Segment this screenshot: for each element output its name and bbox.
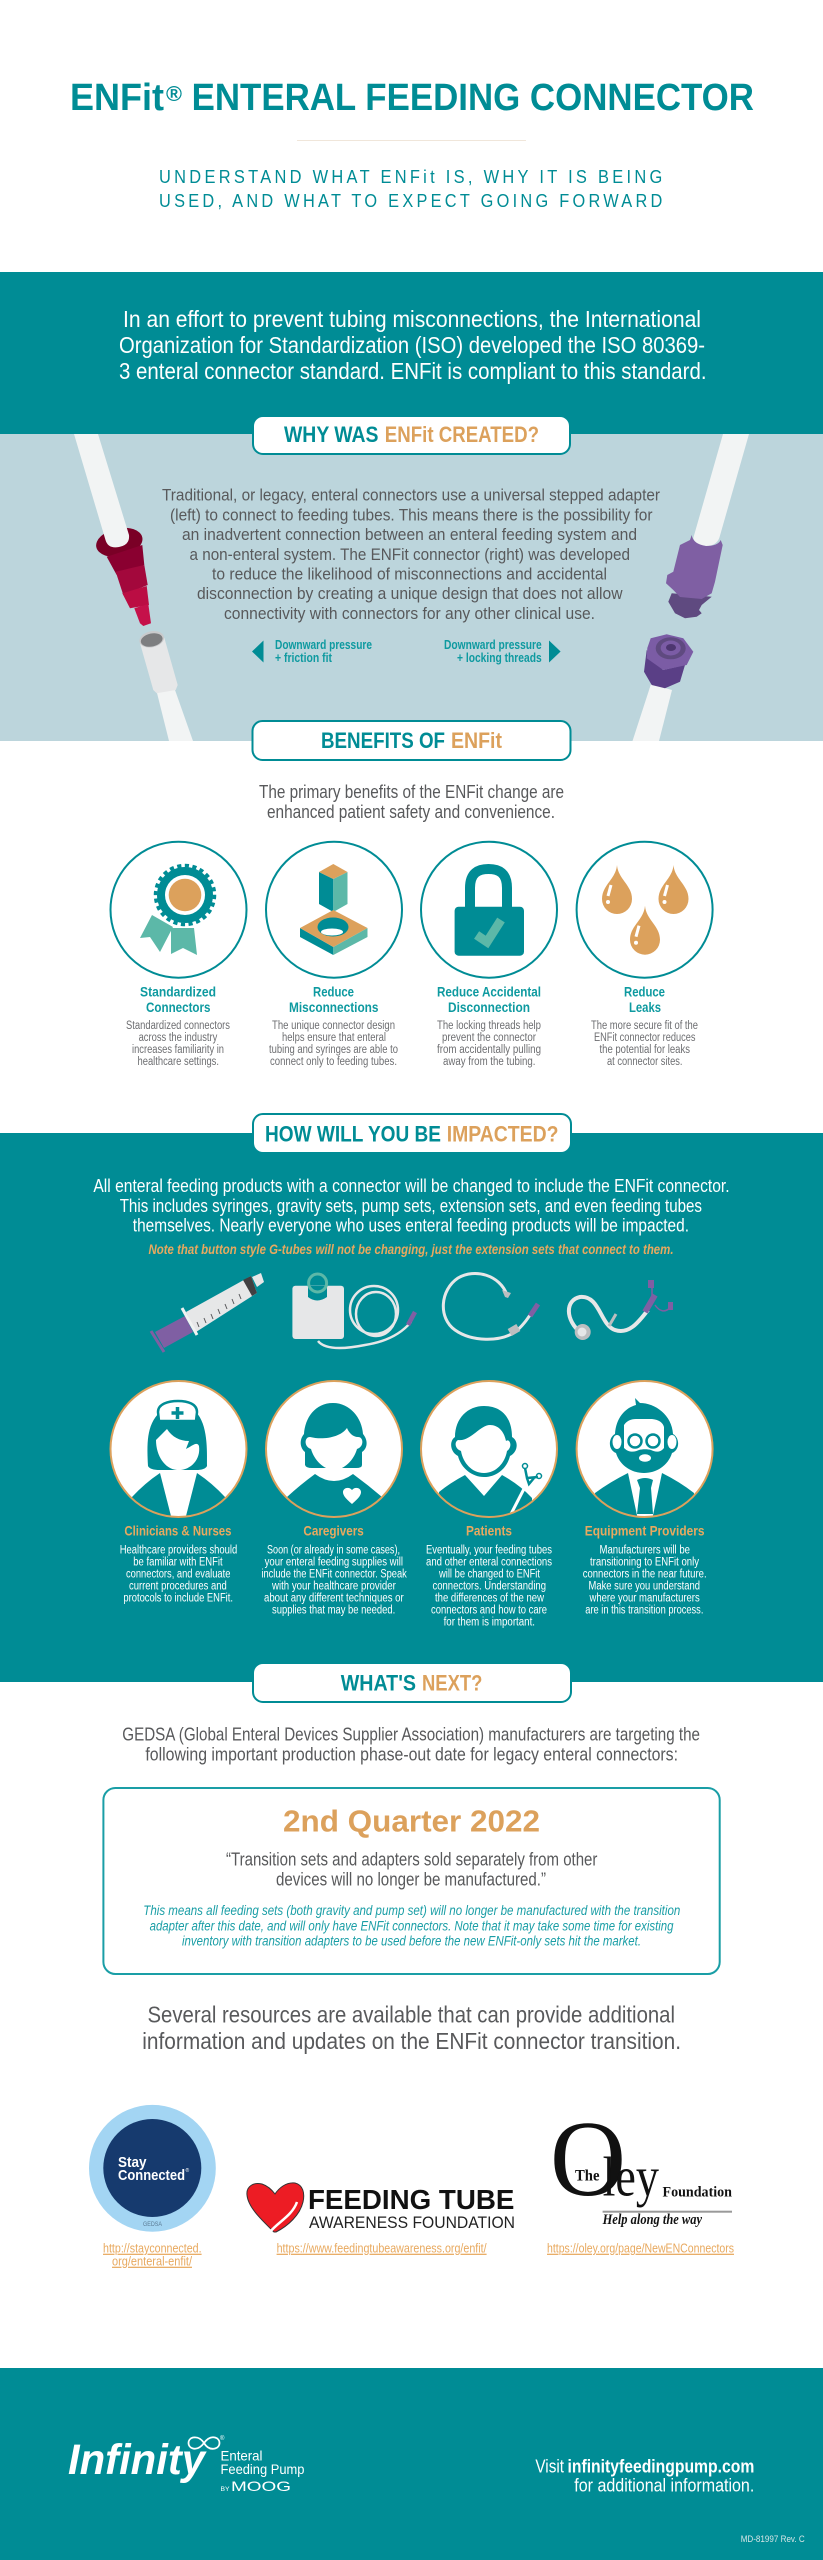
group: equipment providers: Make sure you understand: [588, 1580, 700, 1592]
title: ENTERAL FEEDING CONNECTOR: [192, 77, 754, 119]
logo: Infinity: Feeding Pump: [220, 2461, 305, 2477]
group: patients: for them is important.: [444, 1616, 535, 1628]
group: clinicians and nurses: protocols to include ENFit.: [123, 1592, 233, 1604]
logo: Oley foundation: O: [550, 2100, 626, 2219]
benefit: reduce leaks: [591, 984, 698, 1068]
explanation text: a non-enteral system. The ENFit connector (right) was developed: [190, 545, 630, 564]
heading pill: WHY WAS: [284, 422, 378, 447]
icon: caregiver: [266, 1381, 402, 1520]
link: feeding tube awareness: https://www.feedingtubeawareness.org/enfit/: [277, 2242, 487, 2256]
logo: feeding tube awareness foundation: [247, 2183, 515, 2232]
benefits intro: enhanced patient safety and convenience.: [267, 802, 555, 822]
benefit: reduce accidental disconnection: from accidentally pulling: [437, 1044, 541, 1056]
ENFit connector illustration: [632, 434, 749, 741]
callout: key date: inventory with transition adapters to be used before the new ENFit-only sets hit the market.: [182, 1934, 641, 1949]
group: clinicians and nurses: connectors, and evaluate: [126, 1568, 230, 1580]
heading pill: [253, 1663, 571, 1702]
logo: Infinity: MOOG: [231, 2478, 291, 2494]
logo: Oley foundation: Help along the way: [602, 2212, 702, 2228]
link: Oley: https://oley.org/page/NewENConnectors: [547, 2242, 734, 2256]
panel: why was ENFit created: [0, 416, 823, 741]
group: equipment providers: transitioning to ENFit only: [590, 1556, 699, 1568]
benefit: reduce misconnections: connect only to feeding tubes.: [270, 1056, 397, 1068]
group: equipment providers: where your manufacturers: [589, 1592, 700, 1604]
logo: Infinity: ®: [220, 2435, 225, 2442]
explanation text: Traditional, or legacy, enteral connectors use a universal stepped adapter: [162, 486, 660, 505]
logo: Oley foundation: Foundation: [662, 2185, 733, 2201]
explanation text: [162, 486, 660, 623]
icon: padlock: [421, 842, 557, 978]
benefit: reduce misconnections: [269, 984, 398, 1068]
group: patients: Patients: [466, 1523, 512, 1539]
caption: legacy: + friction fit: [275, 651, 333, 665]
group: equipment providers: Equipment Providers: [585, 1523, 705, 1539]
icon: gravity bag: [292, 1274, 415, 1348]
group: patients: and other enteral connections: [426, 1556, 552, 1568]
benefit: reduce leaks: the potential for leaks: [600, 1044, 690, 1056]
group: caregivers: include the ENFit connector. Speak: [261, 1568, 407, 1580]
group: caregivers: Caregivers: [303, 1523, 364, 1539]
callout: key date: devices will no longer be manufactured.”: [276, 1869, 546, 1889]
intro text: 3 enteral connector standard. ENFit is compliant to this standard.: [119, 358, 706, 384]
heading pill: [252, 721, 570, 760]
arrow: right: [549, 640, 561, 662]
document code: MD-81997 Rev. C: [741, 2534, 805, 2545]
benefit: reduce leaks: Leaks: [629, 999, 661, 1015]
benefit: reduce leaks: The more secure fit of the: [591, 1020, 698, 1032]
explanation text: disconnection by creating a unique design that does not allow: [197, 584, 623, 603]
benefit: reduce misconnections: The unique connector design: [272, 1020, 395, 1032]
benefit: standardized connectors: healthcare settings.: [138, 1056, 219, 1068]
logo: feeding tube awareness foundation: AWARENESS FOUNDATION: [309, 2213, 515, 2232]
GEDSA text: GEDSA (Global Enteral Devices Supplier Association) manufacturers are targeting the: [122, 1725, 700, 1745]
group: patients: connectors. Understanding: [432, 1580, 546, 1592]
group: clinicians and nurses: be familiar with ENFit: [133, 1556, 223, 1568]
footer call to action: infinityfeedingpump.com: [568, 2456, 754, 2476]
heading pill: IMPACTED?: [447, 1122, 558, 1146]
logo: Infinity: [68, 2435, 305, 2494]
impact text: themselves. Nearly everyone who uses enteral feeding products will be impacted.: [133, 1216, 689, 1236]
benefit: reduce misconnections: Reduce: [313, 984, 354, 1000]
panel: how will you be impacted: [0, 1114, 823, 1682]
link: stay connected: org/enteral-enfit/: [112, 2255, 192, 2269]
footer call to action: Visit: [535, 2456, 564, 2476]
title: ®: [166, 83, 183, 106]
logo: Infinity: Enteral: [220, 2448, 262, 2464]
icon: patient: [421, 1381, 557, 1520]
benefit: reduce misconnections: helps ensure that enteral: [282, 1032, 386, 1044]
logo: stay connected: ®: [186, 2167, 190, 2174]
benefit: standardized connectors: increases familiarity in: [132, 1044, 224, 1056]
caption: ENFit: Downward pressure: [444, 638, 542, 652]
intro text: Organization for Standardization (ISO) developed the ISO 80369-: [119, 332, 705, 358]
link: stay connected: http://stayconnected.: [103, 2242, 202, 2256]
GEDSA text: [122, 1725, 700, 1764]
group: patients: Eventually, your feeding tubes: [426, 1544, 552, 1556]
group: equipment providers: are in this transition process.: [585, 1604, 703, 1616]
group: patients: connectors and how to care: [431, 1604, 547, 1616]
logo: Infinity: BY: [220, 2487, 230, 2493]
benefit: reduce misconnections: Misconnections: [289, 999, 379, 1015]
heading pill: ENFit: [451, 728, 503, 753]
benefits intro: [259, 782, 564, 822]
panel: benefits: [110, 721, 713, 1068]
benefit: reduce accidental disconnection: The locking threads help: [437, 1020, 541, 1032]
subtitle: USED, AND WHAT TO EXPECT GOING FORWARD: [159, 191, 666, 211]
icon: rosette: [110, 842, 246, 978]
intro text: In an effort to prevent tubing misconnections, the International: [123, 306, 701, 332]
logo: stay connected: Connected: [118, 2167, 185, 2184]
logo: feeding tube awareness foundation: FEEDING TUBE: [308, 2184, 514, 2215]
footer call to action: [535, 2456, 754, 2496]
group: patients: the differences of the new: [435, 1592, 545, 1604]
group: caregivers: your enteral feeding supplies will: [265, 1556, 403, 1568]
callout: key date: 2nd Quarter 2022: [283, 1804, 540, 1839]
group: caregivers: about any different techniques or: [264, 1592, 404, 1604]
group: clinicians and nurses: Clinicians & Nurses: [124, 1523, 232, 1539]
heading pill: NEXT?: [422, 1671, 482, 1696]
icon: equipment provider: [577, 1381, 713, 1520]
benefit: standardized connectors: [126, 984, 230, 1068]
header: [70, 77, 754, 211]
resources text: [142, 2002, 681, 2054]
footer call to action: for additional information.: [574, 2476, 754, 2496]
callout: key date: This means all feeding sets (both gravity and pump set) will no longer be manufactured with the transition: [143, 1903, 680, 1918]
note: Note that button style G-tubes will not be changing, just the extension sets that connect to them.: [148, 1242, 674, 1257]
explanation text: connectivity with connectors for any other clinical use.: [224, 604, 595, 623]
group: caregivers: [261, 1523, 407, 1616]
logo: stay connected: Stay: [118, 2154, 147, 2171]
heading pill: HOW WILL YOU BE: [265, 1122, 441, 1146]
benefit: standardized connectors: Standardized: [140, 984, 216, 1000]
benefit: standardized connectors: Connectors: [146, 999, 211, 1015]
panel: footer: [0, 2368, 823, 2560]
group: clinicians and nurses: Healthcare providers should: [120, 1544, 237, 1556]
heading pill: WHAT'S: [341, 1671, 416, 1696]
benefit: standardized connectors: Standardized connectors: [126, 1020, 230, 1032]
heading pill: [253, 416, 570, 454]
group: patients: will be changed to ENFit: [438, 1568, 541, 1580]
subtitle: [159, 167, 666, 211]
icon: nurse: [110, 1381, 246, 1520]
icon: low profile tube: [569, 1280, 673, 1340]
group: equipment providers: connectors in the near future.: [583, 1568, 707, 1580]
group: caregivers: with your healthcare provider: [271, 1580, 396, 1592]
benefit: reduce leaks: at connector sites.: [607, 1056, 682, 1068]
caption: legacy: Downward pressure: [275, 638, 372, 652]
logo: Oley foundation: The: [575, 2168, 600, 2185]
benefit: reduce accidental disconnection: away from the tubing.: [443, 1056, 536, 1068]
resources text: Several resources are available that can provide additional: [148, 2002, 675, 2028]
explanation text: to reduce the likelihood of misconnections and accidental: [212, 564, 607, 584]
caption: ENFit: + locking threads: [457, 651, 542, 665]
benefit: reduce misconnections: tubing and syringes are able to: [269, 1044, 398, 1056]
impact text: This includes syringes, gravity sets, pump sets, extension sets, and even feeding tubes: [120, 1196, 702, 1216]
link: stay connected: [103, 2242, 202, 2269]
benefit: standardized connectors: across the industry: [139, 1032, 218, 1044]
caption: ENFit: [444, 638, 542, 665]
icon: three drops: [577, 842, 713, 978]
benefit: reduce leaks: ENFit connector reduces: [594, 1032, 696, 1044]
heading pill: BENEFITS OF: [321, 728, 445, 753]
icon: peg and hole: [266, 842, 402, 978]
impact text: All enteral feeding products with a connector will be changed to include the ENFit connector.: [93, 1176, 730, 1196]
GEDSA text: following important production phase-out date for legacy enteral connectors:: [145, 1744, 678, 1764]
benefit: reduce accidental disconnection: Disconnection: [448, 999, 530, 1015]
logo: stay connected: GEDSA: [143, 2222, 162, 2228]
explanation text: (left) to connect to feeding tubes. This means there is the possibility for: [170, 506, 653, 524]
benefit: reduce accidental disconnection: prevent the connector: [442, 1032, 536, 1044]
logo: Oley foundation: ley: [603, 2147, 659, 2209]
group: caregivers: Soon (or already in some cases),: [267, 1544, 400, 1556]
logo: stay connected: [89, 2105, 216, 2232]
impact text: [93, 1176, 730, 1236]
resources text: information and updates on the ENFit connector transition.: [142, 2028, 681, 2054]
callout: key date: “Transition sets and adapters sold separately from other: [226, 1850, 597, 1870]
benefit: reduce accidental disconnection: [437, 984, 541, 1068]
benefit: reduce leaks: Reduce: [624, 984, 665, 1000]
group: equipment providers: [583, 1523, 707, 1616]
group: equipment providers: Manufacturers will be: [600, 1544, 690, 1556]
icon: syringe: [151, 1273, 264, 1352]
group: clinicians and nurses: [120, 1523, 237, 1604]
caption: legacy: [275, 638, 372, 665]
panel: what's next: [89, 1663, 734, 2269]
logo: Infinity: Infinity: [68, 2436, 207, 2484]
heading pill: ENFit CREATED?: [385, 422, 539, 447]
explanation text: an inadvertent connection between an enteral feeding system and: [182, 525, 637, 544]
callout: key date: [103, 1788, 720, 1974]
group: caregivers: supplies that may be needed.: [272, 1604, 395, 1616]
title: ENFit: [70, 77, 164, 119]
benefits intro: The primary benefits of the ENFit change are: [259, 782, 564, 802]
arrow: left: [252, 640, 264, 662]
group: patients: [426, 1523, 552, 1628]
group: clinicians and nurses: current procedures and: [129, 1580, 227, 1592]
legacy connector illustration: [74, 434, 193, 741]
subtitle: UNDERSTAND WHAT ENFit IS, WHY IT IS BEING: [159, 167, 666, 187]
callout: key date: adapter after this date, and will only have ENFit connectors. Note that it may take some time for existing: [150, 1918, 674, 1933]
benefit: reduce accidental disconnection: Reduce Accidental: [437, 984, 541, 1000]
heading pill: [253, 1114, 571, 1153]
panel: intro: [0, 272, 823, 435]
intro text: [119, 306, 706, 384]
logo: Oley foundation: [550, 2100, 733, 2228]
icon: extension set: [443, 1273, 538, 1339]
